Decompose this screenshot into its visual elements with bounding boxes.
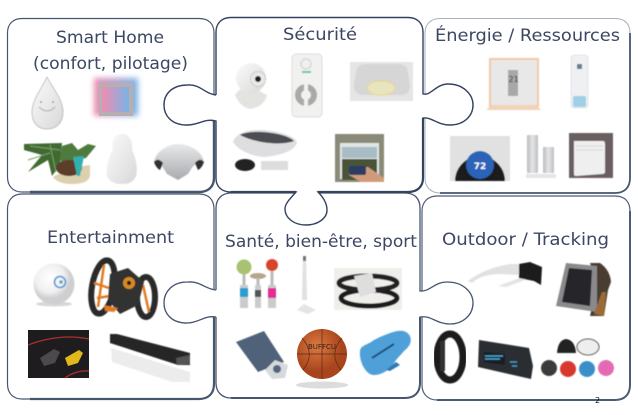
- page number: 2: [595, 396, 600, 405]
- panel: health: [164, 193, 473, 398]
- icon: thermostat: [486, 58, 541, 110]
- title: securite: Sécurité: [283, 25, 357, 45]
- icon: jumping robot: [87, 259, 155, 317]
- icon: bracelet: [334, 268, 402, 310]
- icon: fitness band: [437, 334, 463, 380]
- panel: smart home: [8, 18, 214, 192]
- icon: weather station: [526, 135, 556, 176]
- title: entertainment: Entertainment: [47, 228, 174, 248]
- icon: curved grey device: [154, 144, 204, 180]
- title: sante bien-etre sport: Santé, bien-être, sport: [225, 232, 417, 252]
- icon: connected forks: [236, 259, 278, 308]
- icon: sphero ball: [34, 264, 74, 306]
- panel: energy: [425, 18, 630, 193]
- title: energie ressources: Énergie / Ressources: [435, 24, 620, 46]
- icon: smart watch: [556, 263, 611, 316]
- title: smart home: Smart Home: [56, 28, 164, 48]
- subtitle: confort, pilotage: (confort, pilotage): [33, 54, 188, 74]
- icon: thermostat: 21: [508, 75, 519, 84]
- icon: coloured trackers: [541, 339, 614, 377]
- icon: smart scale: [236, 331, 288, 379]
- icon: toothbrush: [297, 256, 316, 314]
- icon: round thermostat: 72: [474, 162, 486, 172]
- icon: basketball: BUFFCU: [308, 343, 336, 351]
- panel: outdoor tracking: [422, 196, 630, 405]
- panel: entertainment: [8, 194, 214, 399]
- icon: smart lock: [292, 54, 322, 117]
- icon: coloured light panel: [94, 78, 138, 116]
- icon: smoke detector: [350, 62, 413, 101]
- icon: basketball: [296, 329, 348, 388]
- icon: round thermostat: [450, 136, 510, 181]
- title: outdoor tracking: Outdoor / Tracking: [442, 230, 609, 250]
- icon: connected plant: [24, 143, 96, 184]
- icon: pulse tracker: [478, 340, 533, 379]
- icon: water heater: [571, 55, 588, 108]
- icon: white figurine: [107, 134, 137, 184]
- icon: radiator: [569, 133, 613, 178]
- icon: blue activity clip: [360, 331, 411, 375]
- icon: ip camera: [235, 63, 267, 109]
- icon: soundbar: [110, 334, 190, 382]
- icon: smart glasses: [468, 262, 542, 287]
- icon: racing cars on track: [28, 330, 89, 378]
- icon: garage door remote: [335, 134, 384, 182]
- icon: home hub with sensors: [233, 130, 297, 171]
- icon: white drop remote: [32, 77, 63, 129]
- panel: security: [164, 18, 473, 225]
